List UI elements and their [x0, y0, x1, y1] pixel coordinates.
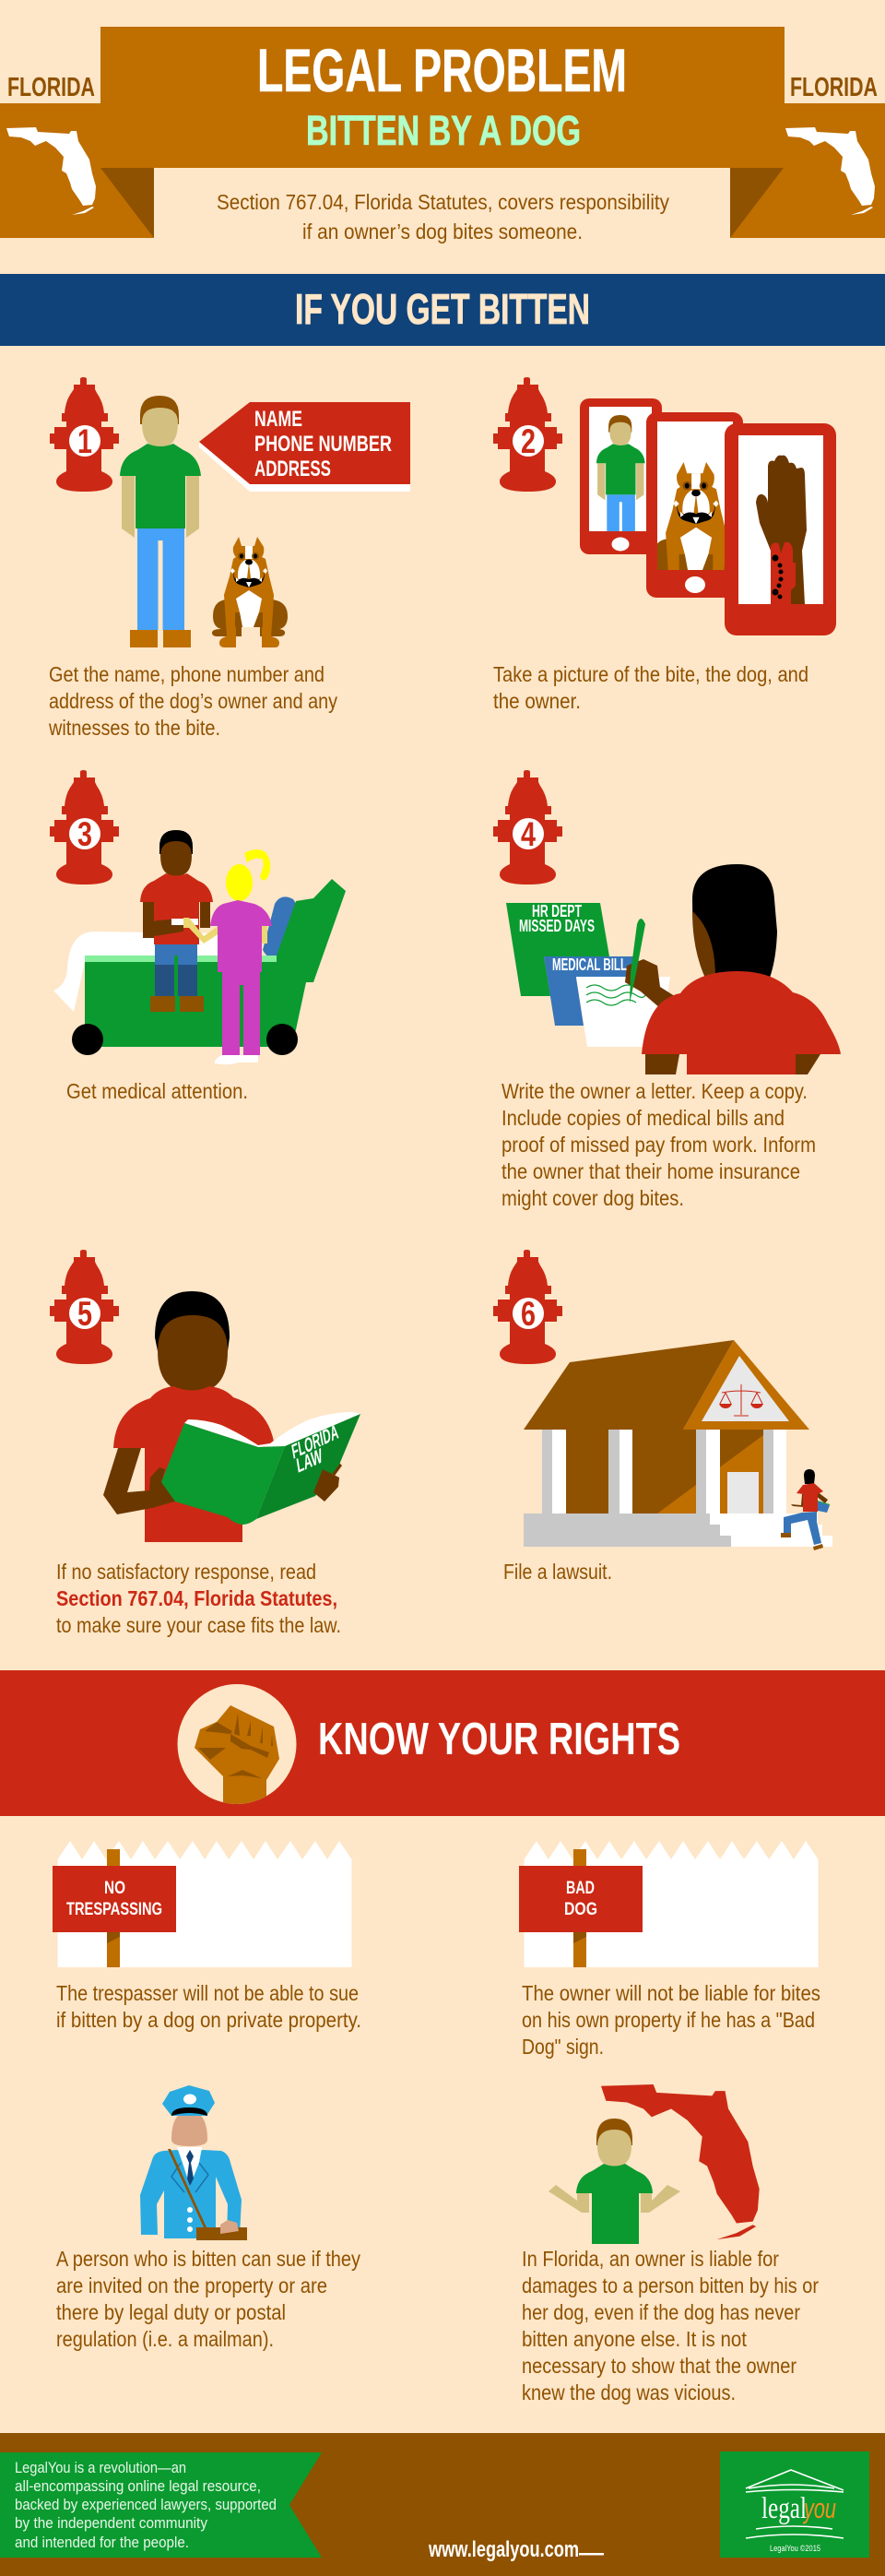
- callout: details to collect: NAME: [254, 407, 302, 432]
- figure: man: [120, 396, 201, 647]
- callout: details to collect: PHONE NUMBER: [254, 432, 392, 457]
- icon: hydrant 5: 5: [77, 1295, 92, 1333]
- figure: person reading: [103, 1291, 342, 1542]
- document: HR dept: [506, 902, 609, 996]
- text: Florida liability: necessary to show that the owner: [522, 2354, 796, 2378]
- icon: law book: [161, 1412, 360, 1525]
- text: bad dog sign: The owner will not be liable for bites: [522, 1981, 820, 2005]
- columns: [542, 1430, 786, 1514]
- ribbon: about LegalYou: LegalYou is a revolution—an: [15, 2459, 186, 2476]
- icon: hydrant 6: [493, 1250, 562, 1364]
- text: mailman: are invited on the property or are: [56, 2273, 327, 2297]
- website url: www.legalyou.com: [428, 2537, 579, 2562]
- pediment: [683, 1340, 809, 1430]
- ribbon: about LegalYou: all-encompassing online legal resource,: [15, 2477, 261, 2495]
- figure: patient visitor: [140, 830, 213, 1012]
- text: mailman: there by legal duty or postal: [56, 2300, 286, 2324]
- text: mailman: A person who is bitten can sue if they: [56, 2247, 360, 2271]
- text: step 4: [502, 1079, 816, 1210]
- sign: BAD: [566, 1879, 595, 1898]
- title: LEGAL PROBLEM: [257, 36, 627, 104]
- text: trespasser: [56, 1981, 361, 2032]
- figure: mailman: [140, 2085, 247, 2240]
- text: Florida liability: bitten anyone else. It is not: [522, 2327, 747, 2351]
- sign: [519, 1866, 643, 1932]
- icon: scales of justice: [719, 1384, 763, 1416]
- header banner: [0, 27, 885, 243]
- sign post: [107, 1849, 120, 1967]
- icon: hydrant 1: 1: [77, 422, 92, 460]
- icon: hydrant 3: 3: [77, 815, 92, 853]
- text: step 2: the owner.: [493, 689, 581, 713]
- left ribbon tail: [0, 103, 154, 238]
- icon: dog: [212, 537, 288, 647]
- intro text: Section 767.04, Florida Statutes, covers responsibility: [217, 190, 669, 214]
- icon: hydrant 1: [50, 377, 119, 492]
- icon: hydrant 2: 2: [521, 422, 536, 460]
- text: step 1: [48, 662, 337, 740]
- document: medical bill: MEDICAL BILL: [552, 956, 627, 974]
- icon: phone with bitten hand: [725, 423, 836, 635]
- text: step 3: Get medical attention.: [66, 1079, 248, 1103]
- sign: [53, 1866, 176, 1932]
- callout: details to collect: ADDRESS: [254, 457, 331, 481]
- text: step 1: witnesses to the bite.: [48, 716, 220, 740]
- roof: [524, 1340, 734, 1430]
- icon: law book: LAW: [295, 1443, 324, 1478]
- icon: hydrant 3: [50, 770, 119, 884]
- icon: hydrant 5: [50, 1250, 119, 1364]
- panel: step 4: [493, 770, 841, 1210]
- text: bad dog sign: Dog" sign.: [522, 2035, 604, 2059]
- icon: raised fist: [177, 1684, 297, 1804]
- logo: LegalYou: you: [803, 2492, 836, 2524]
- panel: no trespassing: [53, 1841, 361, 2032]
- section heading: IF YOU GET BITTEN: [295, 285, 590, 333]
- icon: phone with dog: [646, 412, 743, 598]
- text: bad dog sign: on his own property if he has a "Bad: [522, 2008, 815, 2032]
- footer: [0, 2433, 885, 2576]
- text: step 5: to make sure your case fits the law.: [56, 1613, 341, 1637]
- ribbon: about LegalYou: by the independent community: [15, 2514, 207, 2532]
- figure: person walking in: [781, 1469, 830, 1550]
- text: step 4: Include copies of medical bills and: [502, 1106, 785, 1130]
- document: HR dept: HR DEPT: [532, 902, 582, 920]
- icon: law book: FLORIDA: [290, 1420, 340, 1464]
- section heading: KNOW YOUR RIGHTS: [318, 1715, 680, 1764]
- intro text: if an owner’s dog bites someone.: [302, 220, 583, 243]
- icon: white fence: [57, 1841, 352, 1967]
- sign post: [573, 1849, 586, 1967]
- text: step 4: Write the owner a letter. Keep a copy.: [502, 1079, 808, 1103]
- text: trespasser: if bitten by a dog on private property.: [56, 2008, 361, 2032]
- text: step 5: If no satisfactory response, read: [56, 1560, 316, 1584]
- text: mailman: [56, 2247, 360, 2351]
- text: step 6: File a lawsuit.: [503, 1560, 612, 1584]
- bed: [85, 879, 346, 1047]
- text: Florida liability: [522, 2247, 819, 2404]
- icon: phone with owner: [580, 398, 662, 566]
- text: step 4: the owner that their home insurance: [502, 1159, 800, 1183]
- patient leg: [263, 896, 297, 959]
- icon: hydrant 2: [493, 377, 562, 492]
- main ribbon: [100, 27, 785, 168]
- logo: LegalYou: [720, 2451, 869, 2558]
- icon: Florida map: [601, 2084, 760, 2239]
- icon: Florida map right: [785, 127, 875, 215]
- callout: details to collect: [199, 402, 410, 492]
- text: step 4: proof of missed pay from work. Inform: [502, 1133, 816, 1157]
- document: HR dept: MISSED DAYS: [519, 917, 595, 935]
- icon: white fence: [524, 1841, 819, 1967]
- section band: know your rights: [0, 1670, 885, 1816]
- ribbon: about LegalYou: and intended for the people.: [15, 2534, 189, 2551]
- panel: Florida liability: [522, 2084, 819, 2404]
- text: Florida liability: In Florida, an owner is liable for: [522, 2247, 779, 2271]
- panel: bad dog: [519, 1841, 820, 2059]
- text: step 4: might cover dog bites.: [502, 1186, 684, 1210]
- sign: NO: [104, 1879, 125, 1898]
- text: trespasser: The trespasser will not be able to sue: [56, 1981, 359, 2005]
- left ribbon fold: [100, 168, 154, 238]
- panel: step 2: [493, 377, 836, 713]
- icon: Florida map left: [6, 127, 96, 215]
- text: step 2: Take a picture of the bite, the dog, and: [493, 662, 808, 686]
- text: Florida liability: knew the dog was vicious.: [522, 2380, 736, 2404]
- text: step 5: [56, 1560, 341, 1637]
- bed sheet: [53, 932, 221, 1012]
- right ribbon tail: [730, 103, 885, 238]
- text: step 2: [493, 662, 808, 713]
- subtitle: BITTEN BY A DOG: [306, 107, 581, 154]
- panel: mailman: [56, 2085, 360, 2351]
- ribbon: about LegalYou: [0, 2452, 322, 2558]
- wheels: [72, 1024, 298, 1055]
- text: step 5: Section 767.04, Florida Statutes,: [56, 1586, 337, 1610]
- document: medical bill: [544, 956, 641, 1026]
- wall: [566, 1430, 763, 1514]
- figure: person writing: [625, 864, 841, 1074]
- intro text: [217, 190, 669, 243]
- panel: step 5: [50, 1250, 360, 1637]
- icon: hydrant 4: 4: [521, 815, 536, 853]
- ribbon: about LegalYou: backed by experienced lawyers, supported: [15, 2496, 277, 2513]
- icon: hydrant 6: 6: [521, 1295, 536, 1333]
- figure: shrugging man: [549, 2119, 680, 2244]
- logo: LegalYou: legal: [761, 2492, 807, 2525]
- text block: intro background: [154, 168, 730, 238]
- right ribbon fold: [730, 168, 784, 238]
- figure: nurse: [183, 849, 272, 1064]
- panel: step 3: [50, 770, 346, 1103]
- text: bad dog sign: [522, 1981, 820, 2059]
- sign: DOG: [564, 1900, 597, 1919]
- text: step 1: Get the name, phone number and: [49, 662, 324, 686]
- panel: step 1: [48, 377, 410, 740]
- text: Florida liability: damages to a person bitten by his or: [522, 2273, 819, 2297]
- section band: if you get bitten: [0, 274, 885, 346]
- logo: LegalYou: LegalYou ©2015: [770, 2544, 820, 2554]
- illustration: courthouse: [524, 1340, 832, 1547]
- steps: [524, 1514, 731, 1547]
- text: Florida liability: her dog, even if the dog has never: [522, 2300, 800, 2324]
- sign: TRESPASSING: [66, 1900, 162, 1919]
- document: letter: [576, 977, 670, 1047]
- text: mailman: regulation (i.e. a mailman).: [56, 2327, 274, 2351]
- icon: hydrant 4: [493, 770, 562, 884]
- label: Florida left: FLORIDA: [7, 73, 95, 102]
- illustration: hospital bed scene: [53, 830, 346, 1064]
- panel: step 6: [493, 1250, 832, 1584]
- text: step 1: address of the dog’s owner and any: [49, 689, 337, 713]
